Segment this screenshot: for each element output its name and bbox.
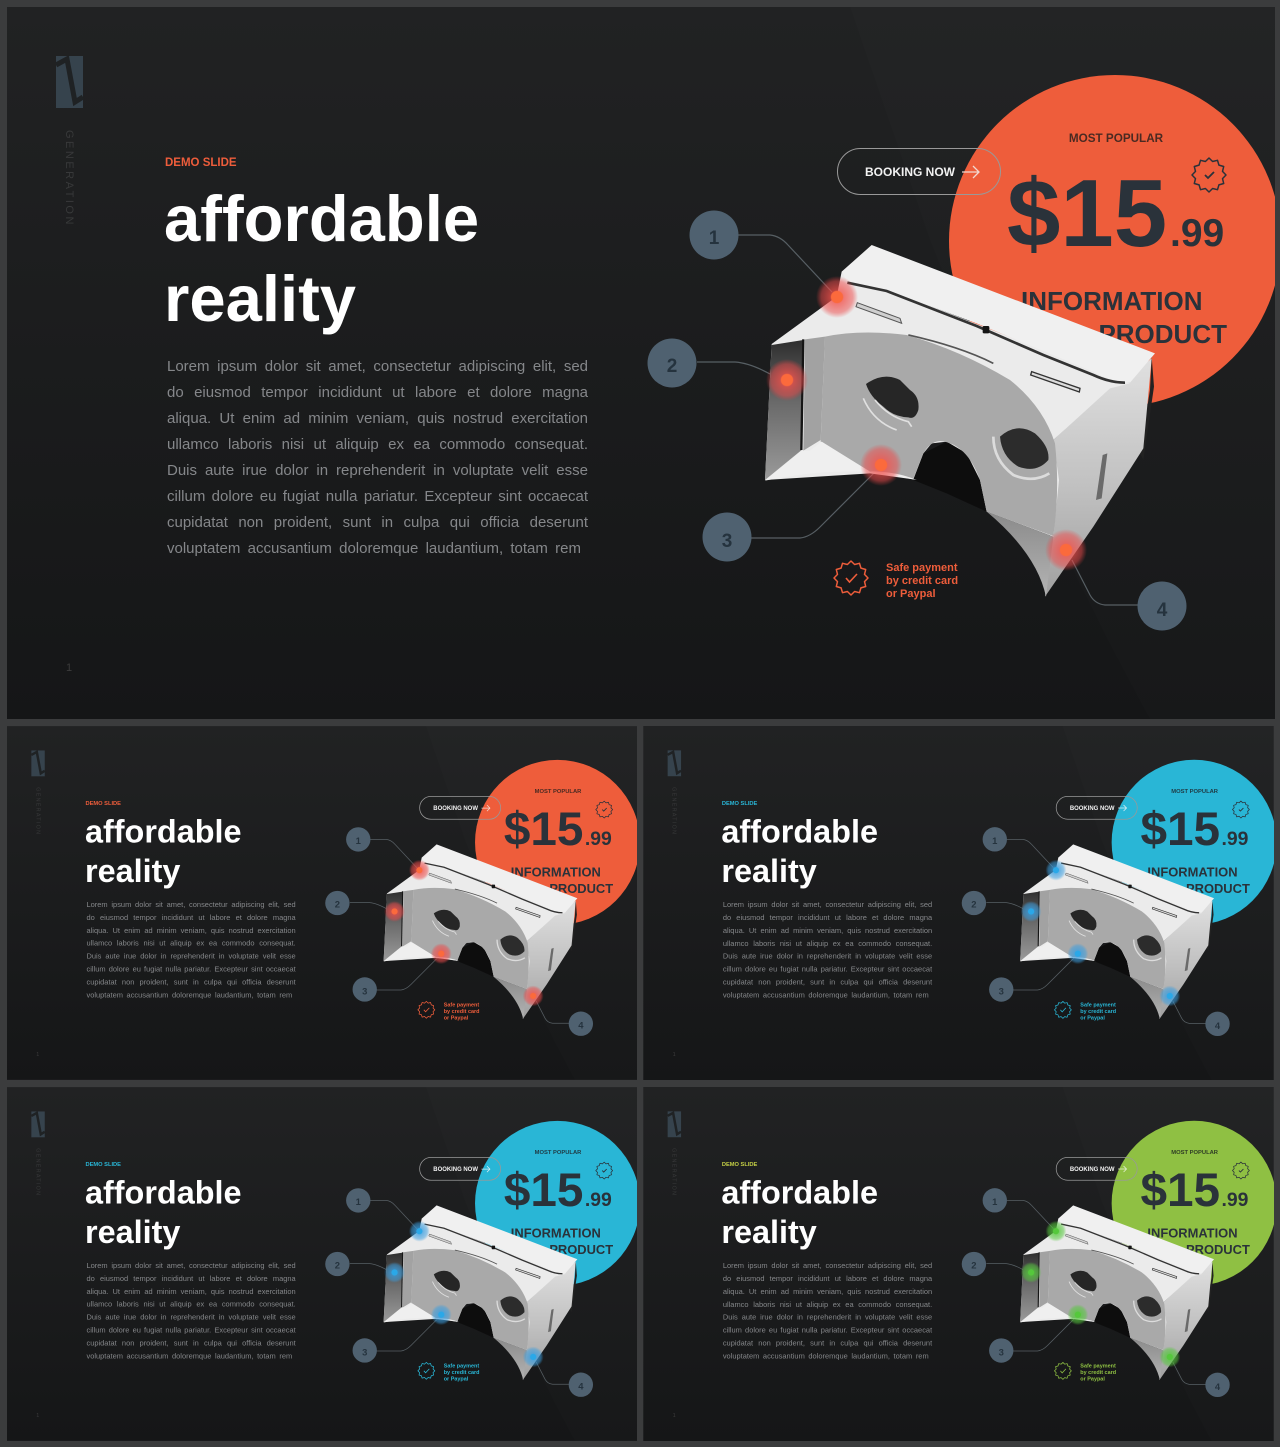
information text: PRODUCT — [1186, 881, 1250, 896]
safe payment note: Safe payment — [1080, 1363, 1116, 1369]
safe payment note: by credit card — [886, 575, 958, 587]
body text: voluptatem accusantium doloremque laudantium, totam rem — [723, 991, 929, 999]
safe payment note — [1054, 1001, 1116, 1021]
body text: cupidatat non proident, sunt in culpa qui officia deserunt — [723, 1339, 932, 1348]
connector lines — [350, 1200, 569, 1384]
body text: Duis aute irue dolor in reprehenderit in voluptate velit esse — [86, 1313, 296, 1322]
body text: cillum dolore eu fugiat nulla pariatur. Excepteur sint occaecat — [167, 488, 588, 505]
number markers — [648, 210, 1186, 630]
title: affordable — [85, 1174, 242, 1210]
body text: voluptatem accusantium doloremque laudantium, totam rem — [723, 1352, 929, 1360]
number markers: 1 — [992, 1197, 997, 1208]
title: reality — [85, 1214, 180, 1250]
title — [85, 813, 242, 889]
price: $15 — [504, 1164, 583, 1217]
thumbnail slide: green — [643, 1087, 1274, 1441]
logo — [668, 1111, 681, 1137]
price circle — [475, 1121, 640, 1286]
body text: voluptatem accusantium doloremque laudantium, totam rem — [167, 540, 581, 557]
title: reality — [164, 262, 356, 335]
most popular label: MOST POPULAR — [1171, 789, 1219, 795]
headset illustration — [1020, 1205, 1214, 1380]
headset illustration — [384, 844, 577, 1019]
number markers: 4 — [1215, 1382, 1221, 1393]
body text: cupidatat non proident, sunt in culpa qui officia deserunt — [86, 978, 296, 986]
booking button: BOOKING NOW — [1070, 806, 1115, 812]
body text: do eiusmod tempor incididunt ut labore et dolore magna — [167, 384, 588, 401]
information text: PRODUCT — [1098, 319, 1227, 349]
safe payment note: or Paypal — [1080, 1376, 1105, 1382]
body text — [86, 899, 296, 1003]
body text: cupidatat non proident, sunt in culpa qui officia deserunt — [167, 514, 588, 531]
safe payment note — [418, 1362, 479, 1382]
information text: INFORMATION — [511, 1226, 601, 1241]
information text — [1147, 865, 1250, 896]
hotspots — [384, 860, 544, 1006]
body text: aliqua. Ut enim ad minim veniam, quis nostrud exercitation — [167, 410, 588, 427]
body text: do eiusmod tempor incididunt ut labore et dolore magna — [86, 913, 296, 922]
connector lines — [697, 235, 1138, 605]
number markers: 3 — [362, 986, 367, 997]
logo — [31, 750, 45, 776]
body text: Lorem ipsum dolor sit amet, consectetur adipiscing elit, sed — [86, 901, 296, 909]
body text: ullamco laboris nisi ut aliquip ex ea commodo consequat. — [723, 939, 932, 948]
price circle — [1112, 1121, 1277, 1286]
safe payment note: Safe payment — [1080, 1002, 1116, 1008]
price: .99 — [585, 1189, 612, 1211]
price: .99 — [1170, 212, 1224, 255]
safe payment note: by credit card — [1080, 1370, 1116, 1376]
body text: ullamco laboris nisi ut aliquip ex ea commodo consequat. — [723, 1300, 932, 1309]
title — [721, 1174, 878, 1250]
body text — [86, 1260, 296, 1364]
vertical brand text: GENERATION — [671, 787, 677, 835]
title — [164, 182, 479, 335]
badge icon — [596, 801, 613, 818]
body text: do eiusmod tempor incididunt ut labore et dolore magna — [86, 1274, 296, 1283]
body text: Duis aute irue dolor in reprehenderit in voluptate velit esse — [723, 1313, 932, 1322]
booking button: BOOKING NOW — [433, 1167, 478, 1173]
information text — [1021, 286, 1227, 349]
number markers — [962, 827, 1230, 1036]
information text: INFORMATION — [1147, 865, 1238, 880]
number markers: 2 — [335, 899, 340, 910]
title: affordable — [721, 1174, 878, 1210]
price: $15 — [1140, 803, 1220, 856]
price: .99 — [1222, 828, 1249, 850]
hotspots — [384, 1221, 544, 1367]
number markers: 1 — [356, 1197, 361, 1208]
connector lines — [986, 839, 1206, 1023]
number markers — [325, 827, 593, 1036]
title — [721, 813, 878, 889]
body text: Lorem ipsum dolor sit amet, consectetur adipiscing elit, sed — [723, 1262, 932, 1270]
page number: 1 — [66, 662, 72, 674]
price circle — [1112, 760, 1277, 925]
eyebrow: DEMO SLIDE — [722, 801, 758, 807]
number markers: 1 — [992, 836, 997, 847]
information text: PRODUCT — [549, 1242, 613, 1257]
number markers: 4 — [578, 1382, 584, 1393]
booking button: BOOKING NOW — [865, 165, 956, 179]
number markers — [962, 1188, 1230, 1397]
logo — [668, 750, 681, 776]
body text: cillum dolore eu fugiat nulla pariatur. Excepteur sint occaecat — [86, 965, 296, 974]
body text: Lorem ipsum dolor sit amet, consectetur adipiscing elit, sed — [723, 901, 932, 909]
body text: voluptatem accusantium doloremque laudantium, totam rem — [86, 1352, 292, 1360]
body text: Lorem ipsum dolor sit amet, consectetur adipiscing elit, sed — [86, 1262, 296, 1270]
most popular label: MOST POPULAR — [1069, 132, 1164, 145]
number markers: 2 — [335, 1260, 340, 1271]
safe payment note: by credit card — [1080, 1009, 1116, 1015]
safe payment note: by credit card — [444, 1370, 479, 1376]
body text — [167, 354, 588, 564]
information text: PRODUCT — [549, 881, 613, 896]
page number: 1 — [36, 1052, 39, 1058]
booking button — [1056, 1157, 1137, 1180]
booking button: BOOKING NOW — [433, 806, 478, 812]
price: .99 — [1222, 1189, 1249, 1211]
safe payment note — [418, 1001, 479, 1021]
information text: INFORMATION — [511, 865, 601, 880]
number markers: 3 — [999, 1347, 1004, 1358]
number markers: 1 — [709, 228, 720, 249]
number markers: 2 — [971, 1260, 977, 1271]
thumbnail slide: orange — [7, 726, 637, 1080]
vertical brand text: GENERATION — [34, 1148, 40, 1196]
logo — [31, 1111, 45, 1137]
price: .99 — [585, 828, 612, 850]
body text: cupidatat non proident, sunt in culpa qui officia deserunt — [723, 978, 932, 987]
badge icon — [1192, 158, 1226, 192]
safe payment note: Safe payment — [444, 1002, 479, 1008]
most popular label: MOST POPULAR — [535, 1150, 582, 1156]
price: $15 — [504, 803, 583, 856]
number markers: 3 — [722, 531, 732, 552]
body text: cupidatat non proident, sunt in culpa qui officia deserunt — [86, 1339, 296, 1347]
headset illustration — [765, 245, 1155, 597]
title — [85, 1174, 242, 1250]
page number: 1 — [673, 1052, 676, 1058]
title: affordable — [164, 182, 479, 255]
information text — [511, 865, 613, 896]
body text: Duis aute irue dolor in reprehenderit in voluptate velit esse — [86, 952, 296, 961]
connector lines — [986, 1200, 1206, 1384]
eyebrow: DEMO SLIDE — [86, 801, 121, 807]
page number: 1 — [673, 1413, 676, 1419]
most popular label: MOST POPULAR — [1171, 1150, 1219, 1156]
safe payment note: or Paypal — [444, 1376, 469, 1382]
most popular label: MOST POPULAR — [535, 789, 582, 795]
thumbnail slide: blue top — [643, 726, 1274, 1080]
body text: ullamco laboris nisi ut aliquip ex ea commodo consequat. — [86, 1300, 296, 1309]
number markers — [325, 1188, 593, 1397]
number markers: 1 — [356, 836, 361, 847]
price: $15 — [1140, 1164, 1220, 1217]
body text: aliqua. Ut enim ad minim veniam, quis nostrud exercitation — [723, 1287, 932, 1296]
body text: aliqua. Ut enim ad minim veniam, quis nostrud exercitation — [723, 926, 932, 935]
main slide: orange — [7, 7, 1275, 719]
safe payment note — [1054, 1362, 1116, 1382]
logo — [56, 56, 83, 108]
vertical brand text: GENERATION — [34, 787, 40, 835]
price circle — [949, 75, 1280, 407]
booking button — [1056, 796, 1137, 819]
information text — [511, 1226, 613, 1257]
badge icon — [1232, 1162, 1249, 1179]
price: $15 — [1007, 160, 1167, 267]
number markers: 2 — [971, 899, 977, 910]
body text: cillum dolore eu fugiat nulla pariatur. Excepteur sint occaecat — [723, 1326, 932, 1335]
body text: voluptatem accusantium doloremque laudantium, totam rem — [86, 991, 292, 999]
body text: aliqua. Ut enim ad minim veniam, quis nostrud exercitation — [86, 926, 296, 935]
headset illustration — [384, 1205, 577, 1380]
hotspots — [1021, 1221, 1180, 1367]
body text: do eiusmod tempor incididunt ut labore et dolore magna — [723, 913, 932, 922]
badge icon — [596, 1162, 613, 1179]
number markers: 3 — [999, 986, 1004, 997]
information text — [1147, 1226, 1250, 1257]
body text: ullamco laboris nisi ut aliquip ex ea commodo consequat. — [167, 436, 588, 453]
body text — [723, 1260, 932, 1364]
body text: Lorem ipsum dolor sit amet, consectetur adipiscing elit, sed — [167, 358, 588, 375]
number markers: 4 — [1215, 1021, 1221, 1032]
safe payment note: Safe payment — [886, 562, 958, 574]
hotspots — [1021, 860, 1180, 1006]
safe payment note: or Paypal — [444, 1015, 469, 1021]
eyebrow: DEMO SLIDE — [165, 157, 237, 169]
body text: cillum dolore eu fugiat nulla pariatur. Excepteur sint occaecat — [723, 965, 932, 974]
eyebrow: DEMO SLIDE — [86, 1162, 121, 1168]
hotspots — [766, 276, 1087, 571]
title: reality — [85, 853, 180, 889]
safe payment note: or Paypal — [1080, 1015, 1105, 1021]
vertical brand text: GENERATION — [671, 1148, 677, 1196]
body text: do eiusmod tempor incididunt ut labore et dolore magna — [723, 1274, 932, 1283]
vertical brand text: GENERATION — [63, 130, 75, 227]
page number: 1 — [36, 1413, 39, 1419]
booking button: BOOKING NOW — [1070, 1167, 1115, 1173]
title: affordable — [85, 813, 242, 849]
price circle — [475, 760, 640, 925]
eyebrow: DEMO SLIDE — [722, 1162, 758, 1168]
number markers: 4 — [1157, 600, 1168, 621]
information text: PRODUCT — [1186, 1242, 1250, 1257]
body text — [723, 899, 932, 1003]
information text: INFORMATION — [1147, 1226, 1238, 1241]
badge icon — [1232, 801, 1249, 818]
number markers: 3 — [362, 1347, 367, 1358]
information text: INFORMATION — [1021, 286, 1202, 316]
safe payment note: Safe payment — [444, 1363, 479, 1369]
thumbnail slide: blue bottom — [7, 1087, 637, 1441]
safe payment note: by credit card — [444, 1009, 479, 1015]
body text: cillum dolore eu fugiat nulla pariatur. Excepteur sint occaecat — [86, 1326, 296, 1335]
body text: Duis aute irue dolor in reprehenderit in voluptate velit esse — [167, 462, 588, 479]
title: reality — [721, 1214, 817, 1250]
connector lines — [350, 839, 569, 1023]
headset illustration — [1020, 844, 1214, 1019]
number markers: 4 — [578, 1021, 584, 1032]
title: reality — [721, 853, 817, 889]
booking button — [838, 148, 1000, 194]
safe payment note — [834, 561, 958, 600]
booking button — [420, 1157, 501, 1180]
safe payment note: or Paypal — [886, 588, 936, 600]
title: affordable — [721, 813, 878, 849]
body text: ullamco laboris nisi ut aliquip ex ea commodo consequat. — [86, 939, 296, 948]
number markers: 2 — [667, 356, 677, 377]
body text: aliqua. Ut enim ad minim veniam, quis nostrud exercitation — [86, 1287, 296, 1296]
booking button — [420, 796, 501, 819]
body text: Duis aute irue dolor in reprehenderit in voluptate velit esse — [723, 952, 932, 961]
